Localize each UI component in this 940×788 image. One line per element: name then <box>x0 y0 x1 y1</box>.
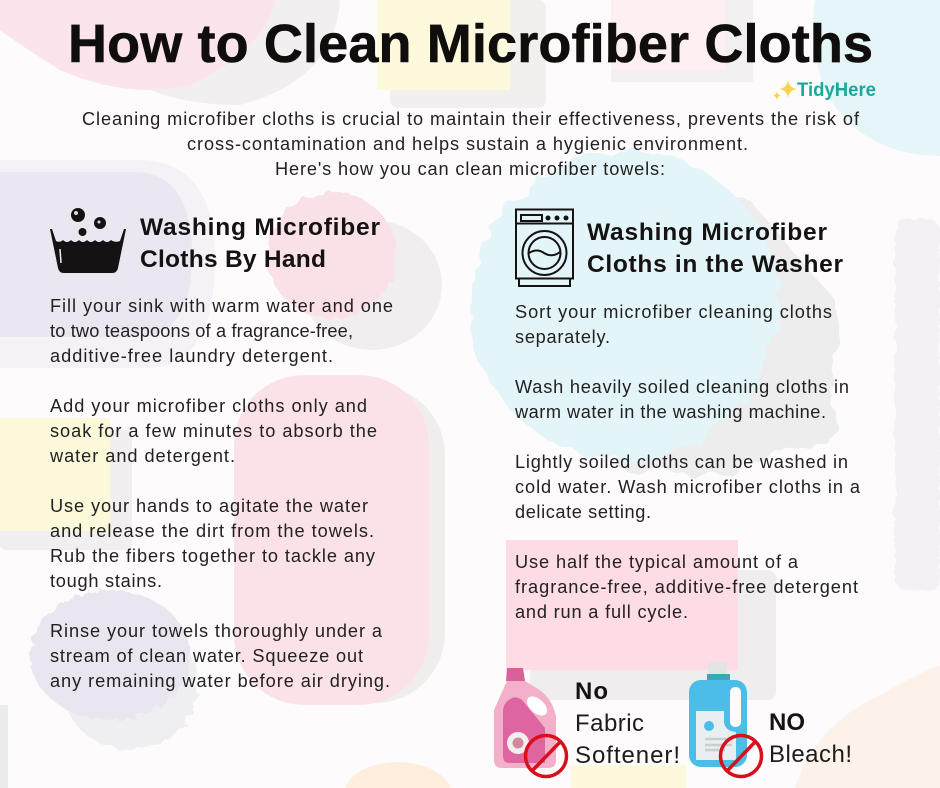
step 1: fill sink: additive-free laundry detergent. <box>50 346 333 366</box>
icon: fabric softener bottle with prohibition sign <box>494 668 566 776</box>
step 4: detergent <box>515 552 858 622</box>
step 4: detergent: and run a full cycle. <box>515 602 688 622</box>
callout: no bleach: Bleach! <box>769 741 852 768</box>
step 3: agitate: and release the dirt from the towels. <box>50 521 374 541</box>
logo: TidyHere: TidyHere <box>797 79 876 101</box>
heading: by hand <box>140 214 380 273</box>
icon: wash basin with bubbles <box>50 208 126 273</box>
step 1: sort <box>515 302 832 347</box>
callout: no bleach <box>769 709 852 768</box>
intro text: Cleaning microfiber cloths is crucial to maintain their effectiveness, prevents the risk of <box>82 109 860 129</box>
step 1: sort: Sort your microfiber cleaning cloths <box>515 302 832 322</box>
intro text: cross-contamination and helps sustain a hygienic environment. <box>187 134 748 154</box>
heading: in the washer <box>587 219 843 278</box>
intro text: Here's how you can clean microfiber towels: <box>275 159 665 179</box>
step 4: detergent: Use half the typical amount of a <box>515 552 799 572</box>
step 3: lightly soiled: cold water. Wash microfiber cloths in a <box>515 477 861 497</box>
step 1: fill sink <box>50 296 393 366</box>
step 3: agitate: tough stains. <box>50 571 162 591</box>
step 1: fill sink: to two teaspoons of a fragrance-free, <box>50 321 353 341</box>
step 4: rinse: stream of clean water. Squeeze out <box>50 646 363 666</box>
step 1: sort: separately. <box>515 327 610 347</box>
step 2: heavily soiled: Wash heavily soiled cleaning cloths in <box>515 377 849 397</box>
step 1: fill sink: Fill your sink with warm water and one <box>50 296 393 316</box>
step 4: rinse: Rinse your towels thoroughly under a <box>50 621 383 641</box>
heading: by hand: Washing Microfiber <box>140 214 380 241</box>
step 2: soak: water and detergent. <box>49 446 235 466</box>
callout: no fabric softener: Softener! <box>575 742 680 769</box>
step 2: heavily soiled <box>514 377 849 422</box>
step 3: lightly soiled: Lightly soiled cloths can be washed in <box>515 452 848 472</box>
icon: bleach bottle with prohibition sign <box>689 662 762 776</box>
step 4: rinse: any remaining water before air drying. <box>50 671 390 691</box>
step 3: agitate: Rub the fibers together to tackle any <box>50 546 376 566</box>
heading: in the washer: Cloths in the Washer <box>587 251 843 278</box>
heading: by hand: Cloths By Hand <box>140 246 326 273</box>
title: How to Clean Microfiber Cloths <box>68 14 873 74</box>
callout: no fabric softener: Fabric <box>575 710 644 737</box>
step 2: soak: soak for a few minutes to absorb the <box>50 421 377 441</box>
panel: washing in the washer <box>514 210 861 622</box>
step 2: heavily soiled: warm water in the washing machine. <box>514 402 826 422</box>
step 4: detergent: fragrance-free, additive-free detergent <box>515 577 858 597</box>
callout: no fabric softener <box>575 678 680 769</box>
callout: no fabric softener: No <box>575 678 608 705</box>
intro text <box>82 109 860 179</box>
step 3: agitate <box>50 496 376 591</box>
step 3: agitate: Use your hands to agitate the water <box>50 496 368 516</box>
panel: washing by hand <box>49 208 393 691</box>
callout: no bleach: NO <box>769 709 805 736</box>
heading: in the washer: Washing Microfiber <box>587 219 827 246</box>
step 3: lightly soiled <box>515 452 861 522</box>
icon: washing machine <box>516 210 573 286</box>
step 3: lightly soiled: delicate setting. <box>515 502 651 522</box>
step 2: soak: Add your microfiber cloths only and <box>50 396 367 416</box>
step 4: rinse <box>50 621 390 691</box>
step 2: soak <box>49 396 377 466</box>
